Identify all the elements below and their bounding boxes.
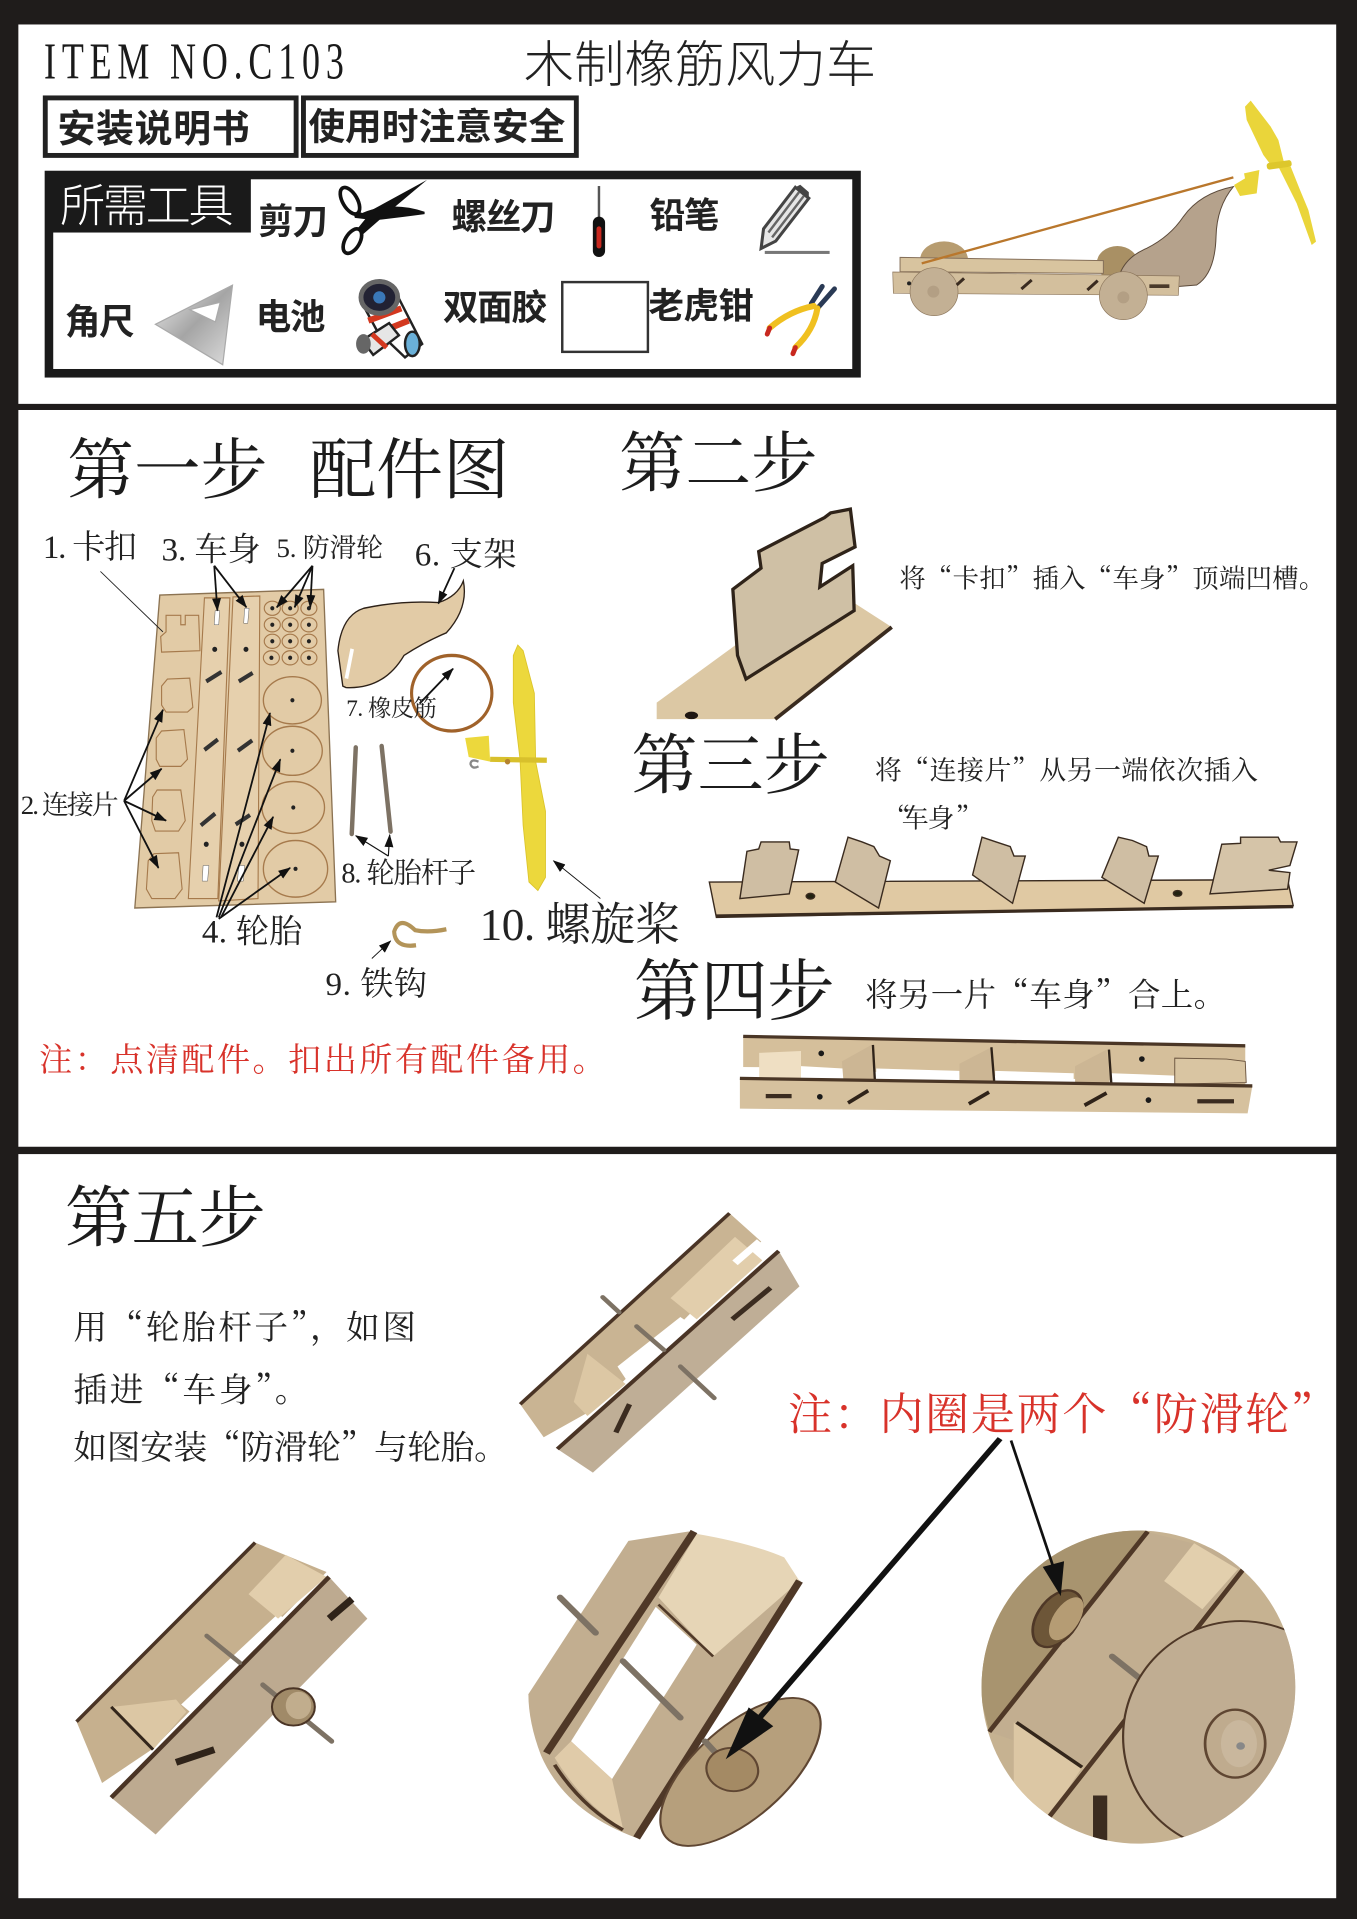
part: iron hook [394,923,446,946]
panel: required tools [49,170,857,373]
icon: tape square [562,282,648,352]
part: car body strips [188,596,260,901]
part: connectors [146,678,193,899]
part: clip outline [161,615,200,652]
arrow: to right anti-slip wheel [1011,1441,1056,1576]
icon: screwdriver [593,186,605,257]
image: step 4 closed body [740,1036,1252,1113]
heading: step 3: 第三步 [631,712,830,807]
part: support bracket [338,581,464,688]
icon: set square [155,285,232,365]
label: scissors: 剪刀 [258,194,328,245]
label: screwdriver: 螺丝刀 [452,189,556,240]
heading: step 4: 第四步 [634,939,835,1035]
part: tyres [262,677,328,897]
part: anti-slip wheels [263,601,317,665]
step 2 instruction: 将“卡扣”插入“车身”顶端凹槽。 [899,557,1325,595]
label: 7 rubber band: 7. 橡皮筋 [346,696,437,722]
red note: inner ring: 注：内圈是两个“防滑轮” [788,1378,1335,1442]
step 5 instructions: 插进“车身”。 [73,1362,308,1411]
label: 2 connector: 2. 连接片 [21,790,119,820]
arrowhead: right anti-slip wheel [1043,1561,1064,1596]
label: 5 anti-slip wheel: 5. 防滑轮 [277,533,383,563]
icon: batteries [356,281,422,357]
box: instruction manual: 安装说明书 [58,98,250,153]
label: 9 hook: 9. 铁钩 [325,966,427,1003]
image: parts sheet [100,566,600,959]
panel: required tools: 所需工具 [60,170,234,236]
label: 10 propeller: 10. 螺旋桨 [480,900,680,950]
label: 3 body: 3. 车身 [162,532,261,569]
image: bottom-middle wheel install [528,1531,848,1869]
step 3 instruction: 车 [902,796,929,835]
part: propeller [465,645,547,891]
step 4 instruction: 将另一片“车身”合上。 [865,970,1226,1016]
panel: step five [18,1154,1357,1898]
icon: pencil [761,185,830,254]
product title: 木制橡筋风力车 [524,25,876,97]
step 5 instructions: 如图安装“防滑轮”与轮胎。 [73,1420,508,1469]
image: top assembly with axles [520,1213,800,1473]
label: 4 tyre: 4. 轮胎 [202,913,303,950]
arrowhead: left anti-slip wheel [726,1707,773,1759]
image: bottom-right full wheel [982,1530,1296,1844]
arrows: part pointers [100,566,600,959]
image: assembled wind car [893,101,1316,320]
step 3 instruction: “ [883,796,910,835]
image: step 3 connectors on body [709,837,1297,917]
panel: header and tools [18,24,1336,404]
step 3 instruction: ” [956,796,983,835]
label: 8 axle rod: 8. 轮胎杆子 [341,857,476,889]
icon: scissors [336,180,427,256]
arrow: to left anti-slip wheel [760,1439,1000,1718]
heading: step 1 parts diagram: 第一步 [67,417,267,513]
label: set square: 角尺 [65,294,135,345]
red note: check parts: 注：点清配件。扣出所有配件备用。 [39,1034,606,1081]
label: pliers: 老虎钳 [649,278,754,329]
image: step 2 clip inserted [657,509,892,719]
heading: step 2: 第二步 [619,410,817,505]
icon: pliers [767,286,835,354]
step 3 instruction [875,749,1258,835]
part: rubber band [412,655,492,731]
label: pencil: 铅笔 [650,188,719,239]
label: battery: 电池 [256,289,325,340]
label: double-sided tape: 双面胶 [443,279,547,330]
step 5 instructions: 用“轮胎杆子”，如图 [73,1300,416,1349]
step 3 instruction: 将“连接片”从另一端依次插入 [875,749,1258,788]
step 5 instructions [73,1300,508,1469]
panel: steps one to four [18,410,1336,1147]
box: safety notice: 使用时注意安全 [308,97,566,151]
part: axle rods [352,746,391,834]
item number: ITEM NO.C103 [44,32,344,90]
label: 6 bracket: 6. 支架 [415,536,516,573]
heading: step 5: 第五步 [65,1165,266,1261]
image: bottom-left assembly [77,1543,367,1834]
step 3 instruction: 身 [928,796,954,835]
heading: step 1 parts diagram: 配件图 [310,417,510,513]
label: 1 clip: 1. 卡扣 [43,529,137,566]
